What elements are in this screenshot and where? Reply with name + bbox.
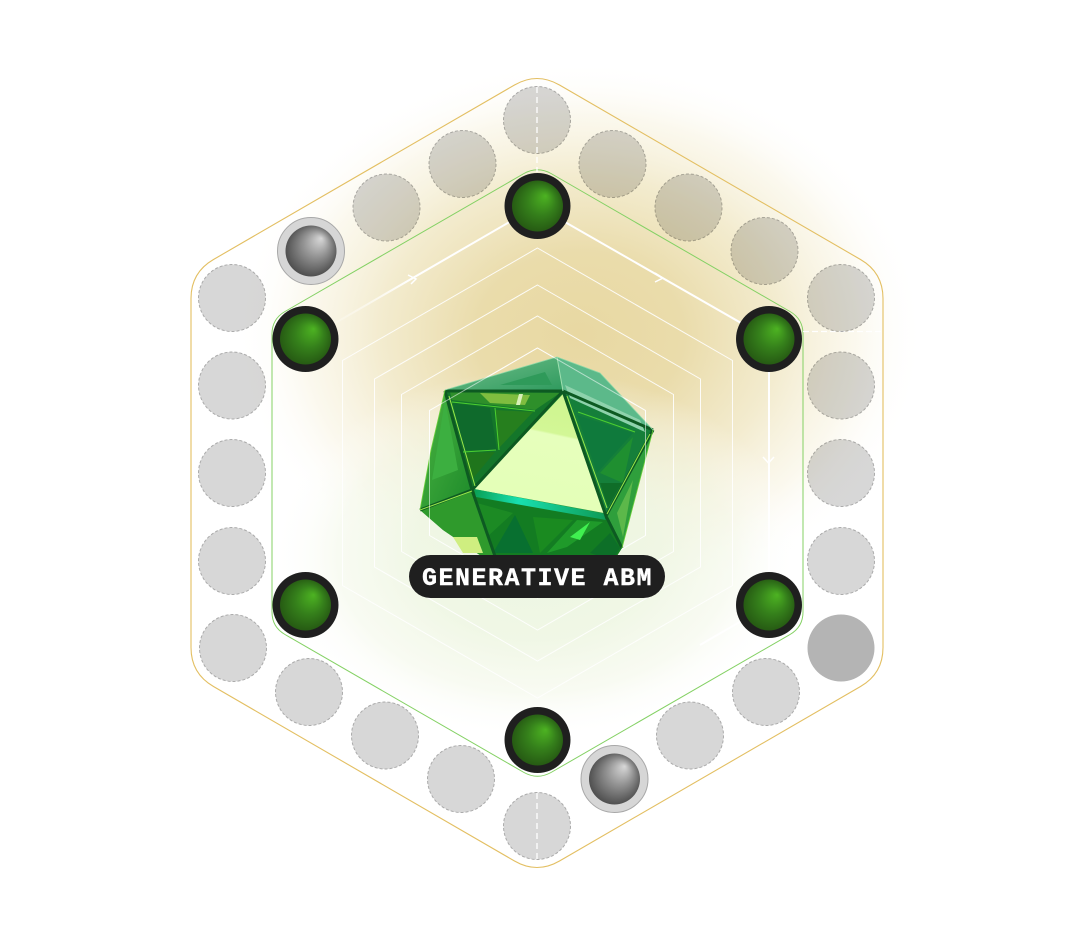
gem edges — [420, 357, 653, 562]
green node: upper left — [272, 306, 338, 372]
gem teal highlight — [474, 489, 606, 520]
metal ball: upper left — [278, 218, 344, 284]
hexagon overlay on the crystal — [430, 348, 646, 536]
label pill: Generative ABM — [409, 555, 665, 598]
metal ball: lower right — [581, 746, 648, 812]
outer gold hexagon — [191, 78, 883, 868]
green node: lower right — [736, 572, 802, 638]
green node: lower left — [272, 572, 338, 638]
concentric inner hexagons — [342, 248, 732, 698]
label pill: Generative ABM: GENERATIVE ABM — [422, 564, 653, 593]
gem internal reflections — [432, 372, 645, 560]
ring of empty slots — [198, 86, 874, 860]
white flow path with arrows — [330, 206, 774, 645]
icon: green crystal — [420, 357, 653, 562]
green node: bottom — [504, 707, 570, 773]
gem central triangle — [474, 394, 604, 513]
background glow — [235, 60, 925, 740]
gem silhouette and base facets — [420, 357, 653, 562]
dark filled slot — [808, 614, 874, 682]
green hexagon — [272, 170, 803, 776]
green node: upper right — [736, 306, 802, 372]
green node: top — [504, 173, 570, 239]
dashed guide lines — [803, 330, 883, 332]
vertical dashed lines in top and bottom slots — [536, 87, 538, 860]
